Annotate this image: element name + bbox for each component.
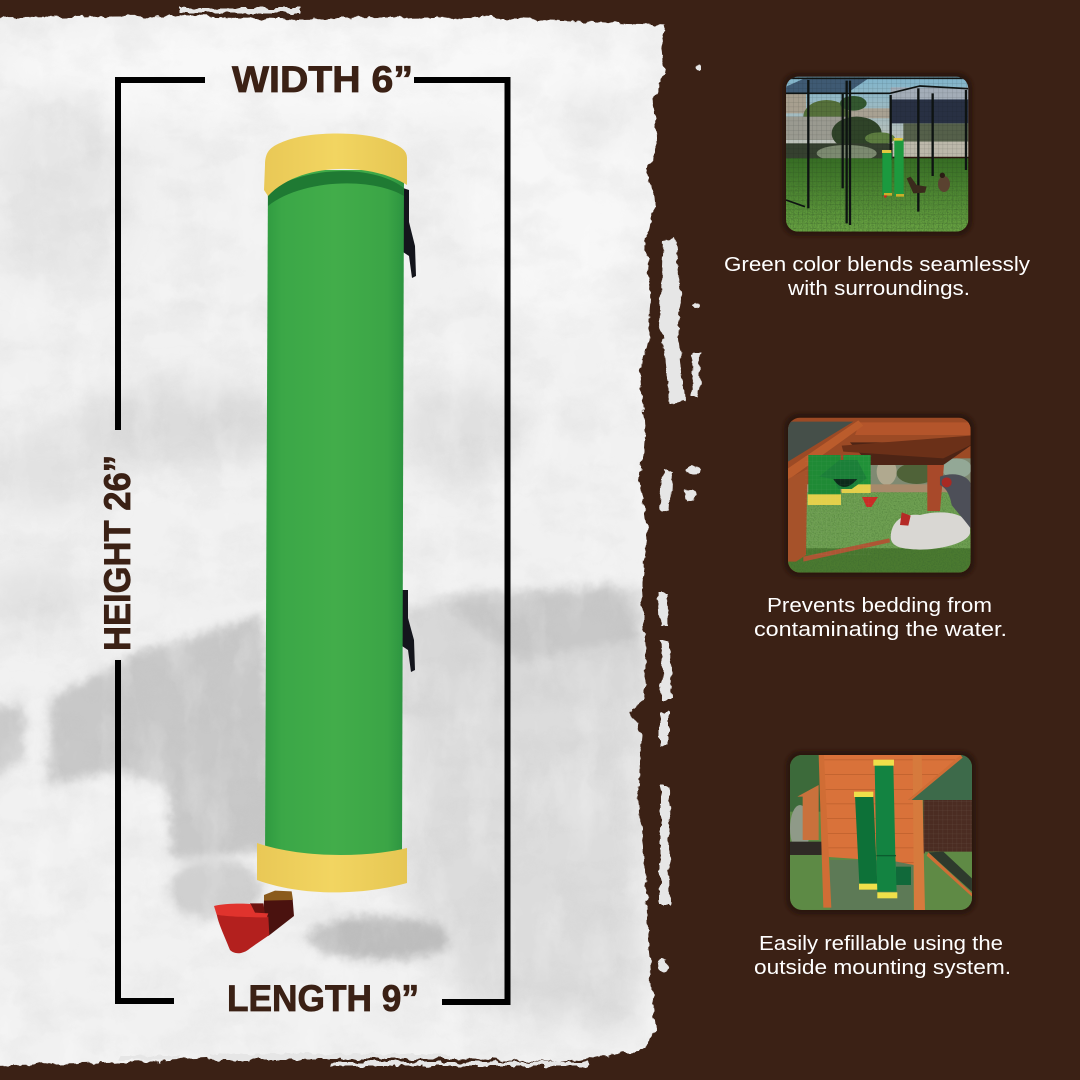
dimension bracket — [118, 80, 508, 1002]
wall clip: lower — [402, 590, 415, 672]
wall clip: upper — [403, 188, 416, 278]
panel: feature 1 — [724, 73, 1030, 300]
panel: feature 2: contaminating the water. — [754, 619, 1007, 641]
decorative lower right grey wash — [402, 640, 640, 1030]
shadow under top cap — [268, 171, 404, 206]
yellow top cap — [264, 134, 407, 196]
decorative paint mottling — [119, 40, 648, 428]
panel: feature 2 — [754, 414, 1007, 641]
photo: coop with mounted tubes — [786, 751, 976, 914]
decorative grey brush areas — [48, 615, 280, 860]
photo: coop interior with hen — [784, 414, 975, 577]
photo: chicken run — [782, 73, 972, 236]
yellow bottom collar — [257, 843, 407, 892]
label: length: LENGTH 9” — [227, 978, 419, 1019]
panel: feature 1: with surroundings. — [787, 278, 970, 300]
panel: feature 3: outside mounting system. — [754, 957, 1011, 979]
panel: feature 3 — [754, 751, 1011, 979]
caption 1: Green color blends seamlessly — [724, 254, 1030, 276]
caption 3: Easily refillable using the — [759, 933, 1003, 955]
panel: textured white brush panel — [0, 0, 700, 1080]
green tube body — [265, 170, 404, 860]
caption 2: Prevents bedding from — [767, 595, 992, 617]
label: height: HEIGHT 26” — [97, 455, 138, 651]
red drinking cup — [214, 891, 294, 953]
label: width: WIDTH 6” — [232, 59, 413, 100]
decorative splatter islands along the panel edge — [120, 8, 703, 1066]
product: chicken waterer tube — [214, 134, 416, 953]
